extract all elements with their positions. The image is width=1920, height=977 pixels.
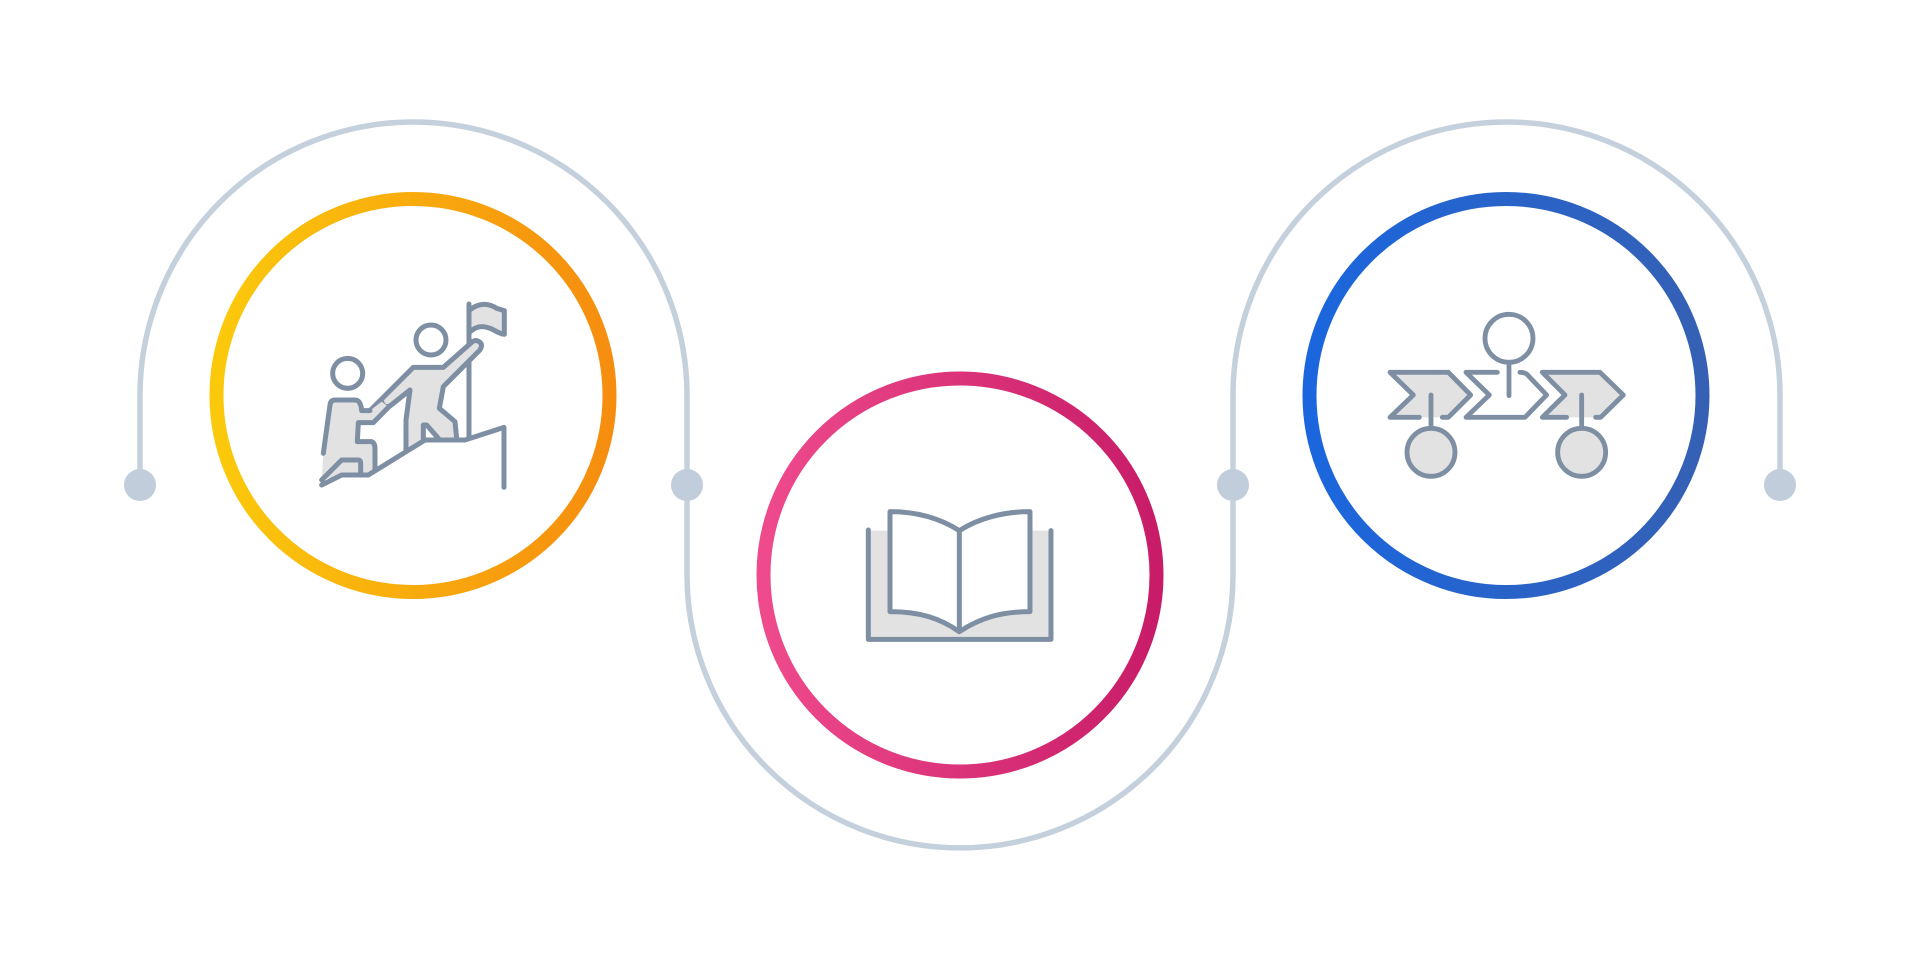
node dot 3 (1217, 469, 1249, 501)
ring: blue (1310, 199, 1702, 592)
node dot 1 (124, 469, 156, 501)
icon: process chevrons with nodes (1390, 314, 1623, 476)
ring: pink (764, 378, 1156, 772)
node dot 4 (1764, 469, 1796, 501)
node dot 2 (671, 469, 703, 501)
icon: climbers reaching flag (322, 304, 504, 487)
ring: yellow-orange (216, 199, 610, 592)
connector path (140, 122, 1780, 848)
icon: open book (868, 512, 1051, 639)
